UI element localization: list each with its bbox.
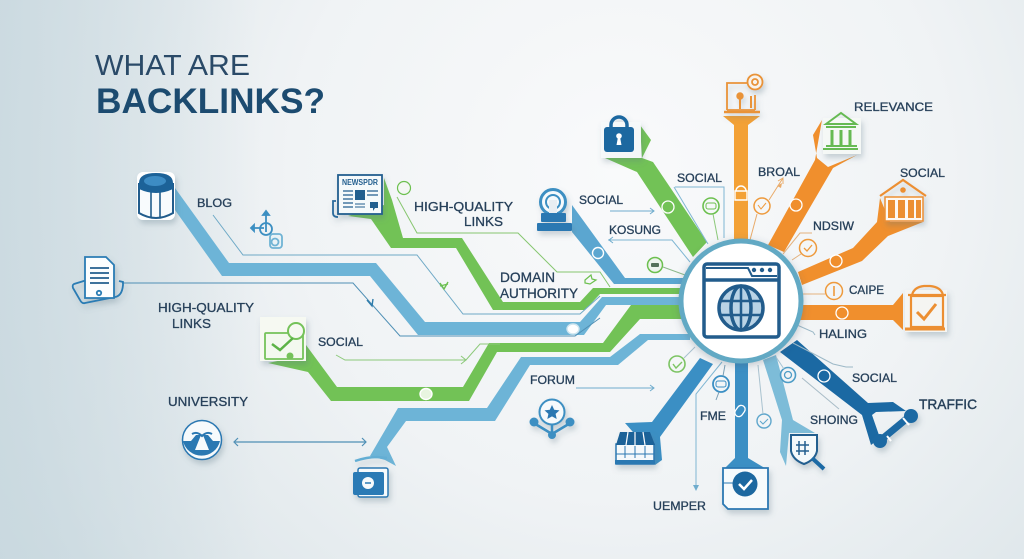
- band: blue store: [625, 358, 713, 465]
- label: traffic: TRAFFIC: [919, 396, 977, 412]
- label: ndsiw: NDSIW: [813, 219, 855, 233]
- link path: social green band: [268, 305, 690, 401]
- band: lock green: [605, 125, 707, 257]
- connector: university double arrow: [234, 438, 366, 446]
- spoke: social bracket top: [675, 187, 724, 238]
- band: orange relevance: [768, 120, 857, 252]
- icon: stamp: [537, 190, 572, 231]
- thin connector: high-quality links: [122, 283, 600, 336]
- thin connector: newspaper green: [397, 182, 610, 289]
- marker: lower blue band: [567, 324, 579, 334]
- hub circle: [681, 241, 801, 361]
- icon: newspaper: [333, 175, 382, 217]
- spoke: shoing line: [802, 378, 839, 409]
- spoke: target circle: [776, 357, 796, 382]
- icon: document stack: [73, 257, 123, 303]
- icon: blue folder lock: [353, 457, 388, 497]
- newspaper masthead: NEWSPDR: [342, 178, 378, 187]
- label: uemper: UEMPER: [653, 499, 706, 513]
- label: social lower right: SOCIAL: [852, 371, 897, 385]
- spoke: green circle mid: [648, 258, 685, 275]
- link path: stamp blue band: [572, 205, 690, 284]
- label: high-quality links left: LINKS: [172, 316, 211, 331]
- label: caipe: CAIPE: [849, 283, 884, 297]
- marker: stamp band: [592, 248, 604, 258]
- globe icon: [719, 286, 763, 330]
- label: social top: SOCIAL: [677, 171, 722, 185]
- background left shading: [0, 0, 260, 559]
- label: broal: BROAL: [758, 165, 800, 179]
- thin connector: blog: [213, 215, 600, 314]
- connector: forum arrow: [576, 385, 654, 391]
- small spoke icons around the hub: [608, 178, 853, 491]
- label: haling: HALING: [819, 327, 867, 341]
- icon: star network: [530, 400, 574, 439]
- spoke: left thin lines: [608, 240, 690, 262]
- label: high-quality links center: LINKS: [464, 214, 503, 229]
- label: social stamp: SOCIAL: [579, 193, 623, 207]
- label: domain authority: DOMAIN: [500, 269, 555, 285]
- label: blog: BLOG: [197, 196, 232, 210]
- connector: broal arrow: [777, 183, 782, 188]
- label: high-quality links left: [158, 300, 254, 331]
- spoke: haling line: [797, 325, 815, 335]
- icon: orange clipboard check: [905, 286, 947, 332]
- spoke: orange badge: [750, 178, 783, 240]
- label: high-quality links left: HIGH-QUALITY: [158, 300, 254, 315]
- icon: database: [137, 172, 175, 220]
- label: social right: SOCIAL: [900, 166, 945, 180]
- band: light blue shield: [763, 355, 815, 466]
- central hub: [681, 241, 801, 361]
- label: relevance: RELEVANCE: [854, 100, 933, 114]
- label: domain authority: AUTHORITY: [500, 285, 579, 301]
- label: high-quality links center: HIGH-QUALITY: [414, 199, 513, 214]
- link path: newspaper green band: [348, 178, 690, 310]
- label: fme: FME: [700, 409, 726, 423]
- connector: social arrow right: [610, 208, 654, 214]
- spoke: green check lower: [669, 347, 695, 372]
- icon: shield magnifier: [791, 435, 824, 469]
- link path: bottom blue band: [370, 334, 690, 466]
- icon: green check card: [260, 317, 306, 361]
- icon: document with check badge: [723, 468, 768, 509]
- label: kosung: KOSUNG: [609, 223, 661, 237]
- spoke: social line: [793, 343, 853, 367]
- title: [95, 50, 325, 121]
- spoke: check small: [757, 365, 771, 428]
- icon: university bell circle: [182, 420, 222, 460]
- spoke: uemper arrow: [693, 362, 722, 491]
- icon: small share cluster: [251, 211, 282, 248]
- spoke: orange caipe badge: [803, 282, 842, 300]
- band: orange house: [798, 198, 923, 285]
- title line two: BACKLINKS?: [96, 82, 325, 121]
- icon: orange house: [880, 180, 926, 221]
- label: domain authority: [500, 269, 579, 301]
- marker: green band: [420, 388, 432, 400]
- icon: green bank: [823, 113, 861, 154]
- link path: blog band: [165, 188, 690, 335]
- thin connector: social green: [336, 344, 500, 364]
- label: shoing: SHOING: [810, 413, 858, 427]
- spoke: orange check: [783, 233, 816, 260]
- spoke: fme circle: [713, 365, 729, 400]
- browser window icon: [704, 264, 779, 337]
- title line one: WHAT ARE: [95, 50, 250, 82]
- connector: kosung arrow left: [609, 237, 613, 243]
- label: high-quality links center: [414, 199, 513, 229]
- label: social left: SOCIAL: [318, 335, 363, 349]
- label: forum: FORUM: [530, 373, 575, 387]
- band: orange up: [723, 116, 760, 240]
- icon: padlock: [601, 117, 641, 158]
- band: blue down: [723, 360, 768, 470]
- spoke: green circle top: [703, 198, 719, 240]
- spoke: social bracket line: [674, 187, 708, 244]
- icon: orange frame with pin: [724, 74, 762, 112]
- label: university: UNIVERSITY: [168, 394, 248, 409]
- band marker icons: [420, 248, 604, 400]
- icon: wrench traffic: [873, 409, 918, 448]
- band: orange horizontal: [800, 293, 903, 330]
- band: navy traffic: [780, 340, 906, 445]
- icon: storefront: [615, 432, 655, 464]
